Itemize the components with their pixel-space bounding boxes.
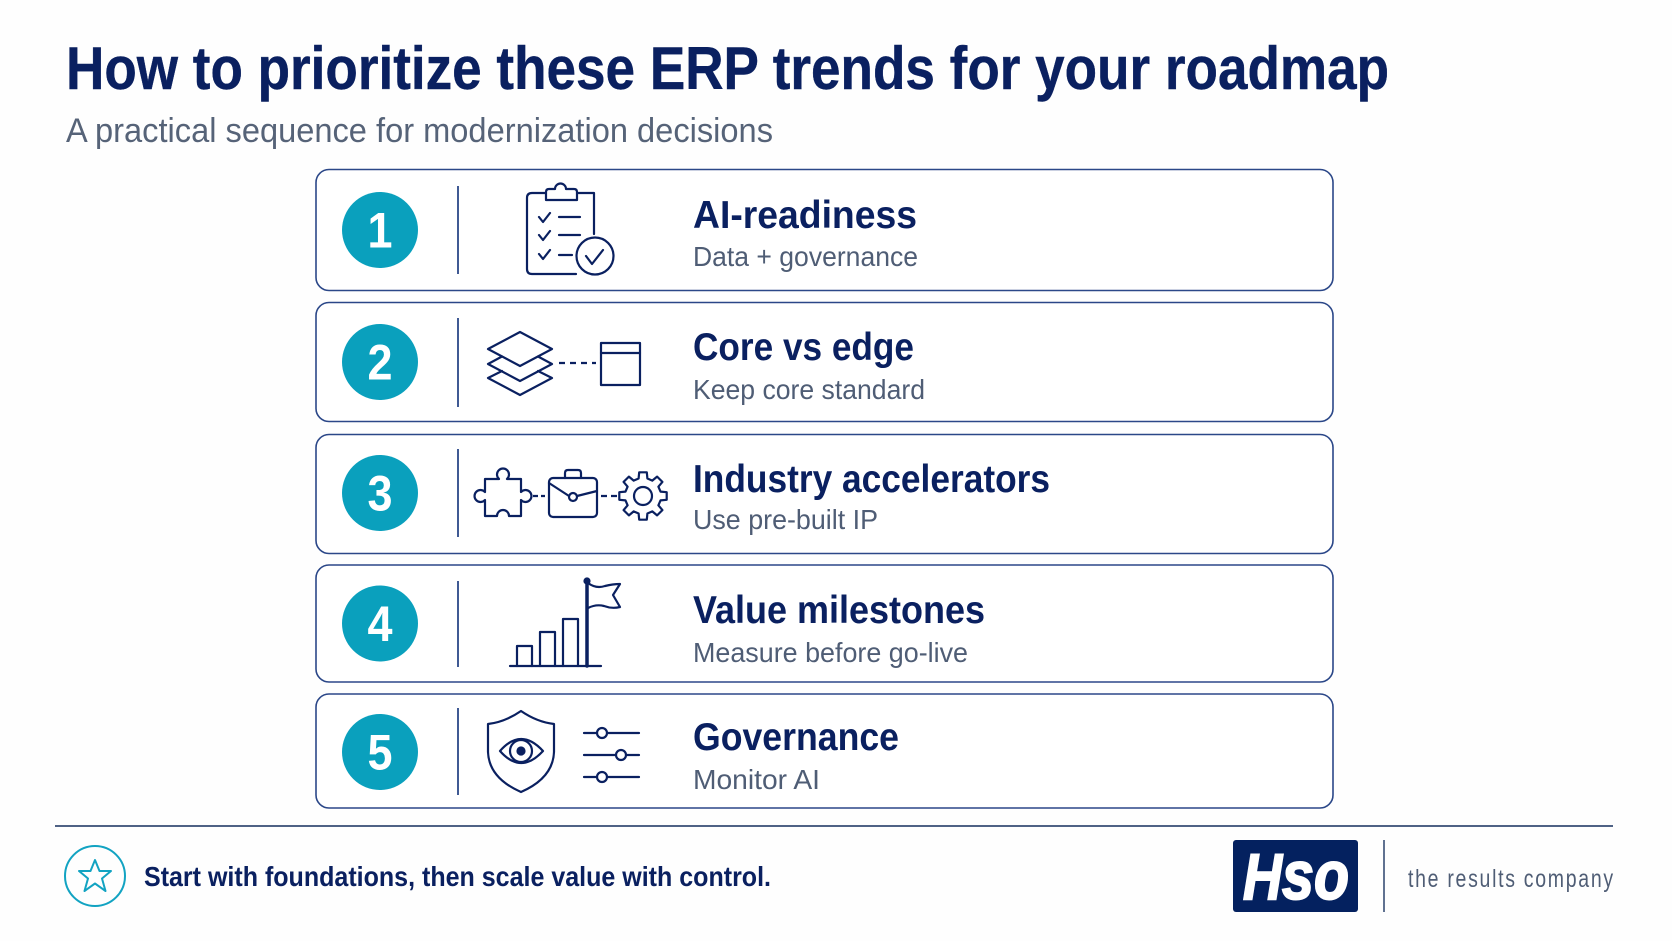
icon: puzzle, briefcase and gear — [475, 469, 667, 520]
logo: Hso: Hso — [1243, 837, 1349, 914]
tagline: the results company — [1408, 865, 1614, 893]
heading: AI-readiness — [693, 194, 917, 237]
step number 1 — [342, 192, 418, 268]
step number 5: 5 — [368, 724, 392, 780]
icon: star in circle — [65, 846, 125, 906]
description: Keep core standard — [693, 374, 925, 405]
step number 1: 1 — [368, 202, 392, 258]
heading: Core vs edge — [693, 326, 914, 369]
description: Measure before go-live — [693, 637, 968, 668]
panel: step 1 AI-readiness — [316, 170, 1333, 290]
heading: Industry accelerators — [693, 458, 1050, 501]
step number 2 — [342, 324, 418, 400]
panel: step 5 Governance — [316, 694, 1333, 808]
step number 3 — [342, 455, 418, 531]
icon: stacked layers linked to window — [488, 332, 640, 395]
icon: shield with eye and sliders — [488, 711, 639, 792]
title: How to prioritize these ERP trends for your roadmap — [66, 35, 1389, 102]
footer takeaway — [65, 846, 771, 906]
step number 4: 4 — [368, 596, 393, 652]
heading: Value milestones — [693, 589, 985, 632]
step number 5 — [342, 714, 418, 790]
heading: Governance — [693, 716, 899, 759]
step number 3: 3 — [368, 466, 392, 522]
icon: clipboard checklist with check badge — [527, 184, 614, 274]
subtitle: A practical sequence for modernization decisions — [66, 112, 773, 150]
description: Monitor AI — [693, 764, 820, 795]
step number 2: 2 — [368, 334, 392, 390]
panel: step 4 Value milestones — [316, 565, 1333, 682]
takeaway text: Start with foundations, then scale value with control. — [144, 861, 771, 892]
icon: bar chart with flag — [510, 578, 620, 666]
panel: step 2 Core vs edge — [316, 302, 1333, 422]
panel: step 3 Industry accelerators — [316, 434, 1333, 554]
description: Use pre-built IP — [693, 504, 878, 535]
step number 4 — [342, 586, 418, 662]
description: Data + governance — [693, 241, 918, 272]
